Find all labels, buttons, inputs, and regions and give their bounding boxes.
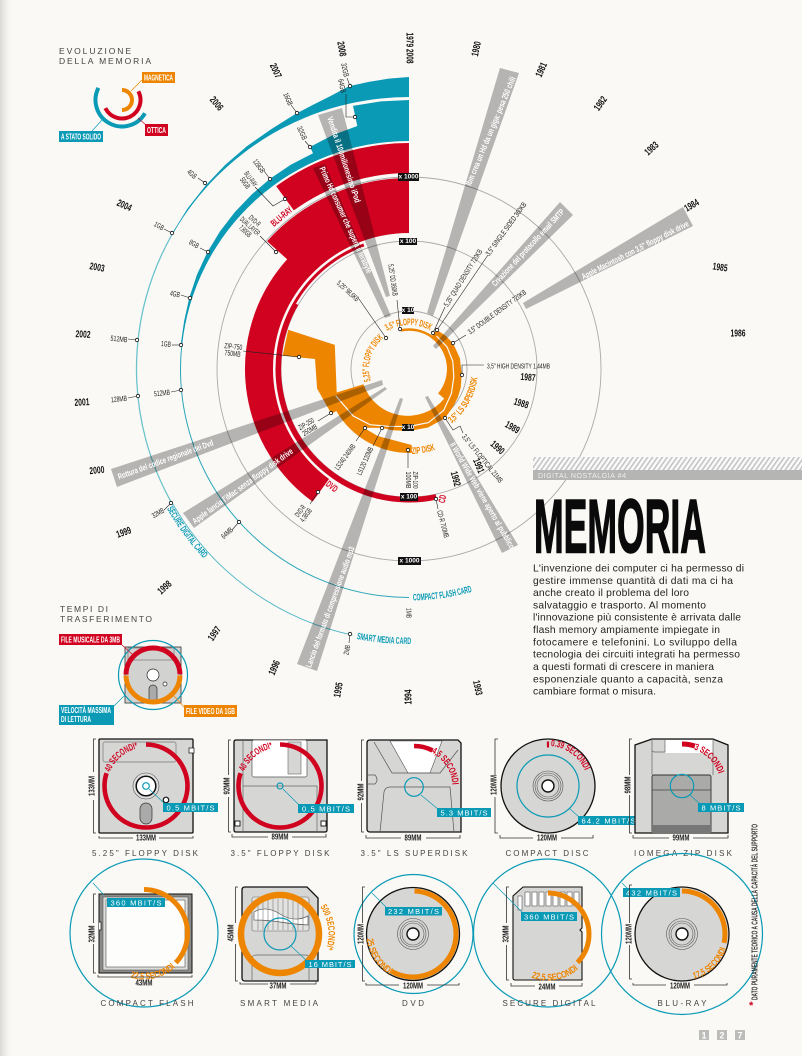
disk: compact flash: 32MM (88, 925, 96, 942)
section heading: evoluzione della memoria: DELLA MEMORIA (59, 56, 151, 66)
section heading: tempi di trasferimento: TRASFERIMENTO (60, 614, 152, 624)
year labels: 1982 (592, 94, 610, 113)
disk: secure digital (473, 858, 622, 1008)
scale rings (217, 177, 601, 561)
disk: secure digital: SECURE DIGITAL (502, 999, 596, 1008)
intro text: salvataggio e trasporto. Al momento (533, 600, 706, 611)
strip captions: Creazione del protocollo email SMTP (490, 207, 567, 288)
disk: 5.25 floppy: 133MM (136, 834, 156, 842)
section band: digital nostalgia: DIGITAL NOSTALGIA #4 (538, 473, 626, 480)
disk: 3.5 LS superdisk: 5.3 MBIT/S (440, 808, 488, 818)
year labels: 1986 (730, 328, 746, 340)
capacity labels: 3,5" HIGH DENSITY 1,44MB (487, 362, 550, 370)
capacity labels: 512MB (110, 334, 128, 344)
strip captions: Il World Wide Web viene aperto al pubblico (448, 441, 517, 550)
disk: dvd: DVD (402, 999, 424, 1008)
capacity labels: LS120 120MB (355, 445, 375, 477)
disk: secure digital: 360 MBIT/S (524, 912, 574, 922)
year labels: 2006 (207, 95, 225, 114)
strip captions: Primo Hd consumer che supera il terabyte (317, 165, 375, 275)
disk: compact flash: COMPACT FLASH (100, 999, 194, 1008)
capacity labels: ZIP-100 (411, 472, 420, 488)
section heading: evoluzione della memoria: EVOLUZIONE (59, 46, 131, 56)
disk: smart media: 16 MBIT/S (308, 960, 352, 969)
page number: 7 (737, 1030, 743, 1040)
disk: 3.5 LS superdisk (356, 739, 491, 858)
year labels: 1996 (267, 659, 283, 677)
legend: transfer times floppy: FILE VIDEO DA 1GB (186, 707, 235, 716)
scale tags: x 100 (400, 238, 417, 245)
year labels: 2008 (334, 41, 348, 58)
year labels: 1989 (503, 419, 521, 437)
capacity labels: 4GB (185, 167, 199, 181)
intro text: anche creato il problema del loro (533, 588, 689, 599)
disk: 5.25 floppy: 5.25" FLOPPY DISK (92, 849, 199, 858)
format name labels: DVD (323, 479, 340, 495)
disk: blu-ray: 432 MBIT/S (626, 888, 677, 898)
scale tags: x 10 (402, 307, 415, 314)
year labels: 1999 (115, 525, 133, 541)
scale tags (398, 173, 421, 565)
strip captions: Vendita il 100milionesimo iPod (325, 115, 363, 204)
page number: 2 (719, 1030, 725, 1040)
legend: memory types: MAGNETICA (144, 74, 173, 82)
intro text: cambiare format o misura. (533, 687, 656, 698)
capacity labels: 5,25" DD 360KB (386, 264, 400, 296)
format name labels: BLU-RAY (269, 204, 295, 229)
disk: smart media: 37MM (270, 982, 287, 990)
strip captions: Apple lancia l'iMac senza floppy disk drive (190, 446, 295, 526)
disk: smart media (226, 886, 355, 1008)
format name labels: SMART MEDIA CARD (357, 632, 411, 644)
disk: iomega zip: IOMEGA ZIP DISK (634, 849, 733, 858)
disk: compact disc: 0.39 SECONDI (551, 740, 591, 770)
intro text: fotocamere e telefonini. Lo sviluppo della (533, 637, 737, 648)
capacity labels: LS240 240MB (333, 442, 357, 472)
intro text: esponenziale quanto a capacità, senza (533, 674, 723, 685)
capacity labels: 8GB (187, 238, 201, 250)
disk: iomega zip: 3 SECONDI (694, 744, 724, 774)
intro text: a questi formati di crescere in maniera (533, 662, 714, 673)
format name labels: SECURE DIGITAL CARD (168, 506, 208, 558)
disk: compact disc (490, 738, 636, 858)
disk: 3.5 LS superdisk: 3.5" LS SUPERDISK (360, 849, 468, 858)
scale tags: x 1000 (399, 174, 419, 180)
capacity labels: 3,5" DOUBLE DENSITY 720KB (466, 288, 528, 336)
disk: blu-ray: 120MM (670, 982, 690, 990)
capacity labels: 100MB (404, 472, 413, 488)
capacity labels: 4GB (169, 289, 181, 299)
disk: 5.25 floppy: 0.5 MBIT/S (166, 804, 214, 812)
disk: 3.5 floppy (222, 739, 354, 858)
scale tags: x 10 (402, 424, 415, 431)
capacity labels: DVD-R (293, 503, 308, 519)
disk: compact disc: 64.2 MBIT/S (582, 816, 636, 826)
format name labels: 5,25" FLOPPY DISK (362, 333, 384, 382)
intro text: L'invenzione dei computer ci ha permesso di (533, 564, 744, 574)
capacity labels: 1GB (152, 220, 166, 232)
year labels: 1991 (470, 457, 486, 475)
disk: secure digital: 24MM (538, 982, 556, 992)
scale tags: x 1000 (400, 558, 420, 564)
scale tags: x 100 (401, 494, 418, 500)
legend: transfer times floppy: DI LETTURA (61, 715, 91, 724)
disk: 5.25 floppy: 133MM (88, 776, 96, 796)
capacity labels: 128MB (111, 394, 127, 404)
format name labels: CD (437, 494, 449, 504)
solid state bands (37, 0, 781, 741)
capacity labels: DUAL LAYER (238, 215, 262, 238)
disk: smart media: 500 SECONDI* (320, 904, 336, 950)
page number: 1 (701, 1030, 707, 1040)
disk: smart media: 45MM (226, 924, 236, 942)
disk: 3.5 floppy: 40 SECONDI* (239, 742, 272, 771)
grey timeline event strips (111, 68, 693, 671)
disk: dvd: 120MM (356, 924, 366, 944)
strip captions (116, 75, 690, 669)
disk: compact flash (69, 858, 219, 1008)
year labels (74, 32, 746, 704)
capacity labels: ZIP-250 (297, 416, 316, 432)
disk: 3.5 floppy: 3.5" FLOPPY DISK (230, 849, 330, 858)
capacity labels: 5,25" QUAD DENSITY 720KB (442, 248, 484, 308)
capacity labels: 128GB (251, 157, 267, 175)
capacity labels: 250MB (301, 422, 319, 438)
year labels: 1997 (206, 624, 224, 643)
leader lines (128, 78, 488, 643)
year labels: 2000 (89, 465, 105, 477)
capacity labels: 50GB (238, 176, 252, 191)
disk: iomega zip: 99MM (672, 834, 690, 842)
disk: secure digital: 22,5 SECONDI (532, 964, 578, 982)
capacity labels: 32GB (339, 62, 351, 78)
capacity labels: DVD-R (247, 213, 263, 229)
disk: 3.5 floppy: 89MM (272, 832, 289, 842)
footnote: DATO PURAMENTE TEORICO A CAUSA DELLA CAPACITÀ DEL SUPPORTO (750, 824, 760, 1000)
capacity labels: 1GB (161, 339, 171, 349)
year labels: 1980 (470, 40, 484, 57)
disk: secure digital: 32MM (502, 925, 510, 942)
disk: dvd (353, 874, 474, 1008)
year labels: 1987 (520, 372, 536, 384)
section band: digital nostalgia (533, 457, 802, 480)
footnote (749, 824, 760, 1012)
disk: smart media: SMART MEDIA (240, 999, 319, 1008)
disk: compact disc: 120MM (537, 834, 557, 842)
disk: dvd: 25 SECONDI (366, 938, 393, 974)
disk: dvd: 120MM (403, 982, 423, 990)
format name labels: 3,5" LS SUPERDISK (448, 376, 478, 423)
capacity labels: 750MB (224, 348, 241, 359)
year labels: 1992 (448, 470, 462, 488)
year labels: 1990 (488, 439, 506, 457)
disk: 3.5 floppy: 92MM (222, 777, 232, 794)
year labels: 1985 (712, 262, 728, 275)
capacity labels: 3,5" LS FLOPTICAL 21MB (460, 432, 505, 485)
optical bands (114, 74, 704, 664)
disk: compact disc: COMPACT DISC (506, 849, 589, 858)
intro text (533, 564, 744, 698)
capacity labels: ZIP-750 (224, 341, 243, 352)
disk: iomega zip: 8 MBIT/S (702, 804, 740, 812)
disk: iomega zip (624, 738, 744, 858)
disk: dvd: 232 MBIT/S (388, 907, 439, 916)
disk: compact flash: 43MM (136, 978, 153, 988)
strip captions: Lancio del formato di compressione audio mp3 (303, 545, 357, 669)
legend: transfer times floppy: FILE MUSICALE DA 3MB (61, 636, 120, 644)
year labels: 1984 (683, 197, 701, 215)
year labels: 1979 2008 (404, 32, 414, 64)
disk: compact disc: 120MM (490, 775, 498, 795)
disk: blu-ray: 17,5 SECONDI (692, 946, 726, 979)
disk: compact flash: 22,5 SECONDI (130, 962, 175, 981)
page number (699, 1030, 745, 1040)
disk: 5.25 floppy: 40 SECONDI* (104, 742, 137, 772)
capacity labels: 32MB (150, 506, 166, 520)
intro text: gestire immense quantità di dati ma ci ha (533, 576, 733, 587)
disk: 5.25 floppy (88, 738, 218, 858)
intro text: tecnologia dei circuiti integrati ha permesso (533, 650, 740, 661)
legend: memory types: OTTICA (147, 126, 166, 135)
section heading: tempi di trasferimento (60, 604, 152, 624)
intro text: l'innovazione più consistente è arrivata dalle (533, 613, 741, 624)
disk: blu-ray: BLU-RAY (658, 999, 707, 1008)
format name labels: COMPACT FLASH CARD (413, 586, 472, 600)
strip captions: Rottura del codice regionale dei Dvd (116, 438, 215, 481)
capacity labels: 4,38GB (298, 506, 314, 524)
capacity labels: 64GB (336, 78, 348, 94)
capacity labels: CD-R 700MB (435, 509, 451, 539)
strip captions: Ibm crea un Hd da un giga: pesa 250 chili (463, 75, 518, 187)
capacity labels: 1MB (404, 608, 414, 618)
disk: 3.5 floppy: 0.5 MBIT/S (302, 804, 350, 814)
year labels: 2002 (75, 329, 91, 341)
capacity labels: 16GB (281, 91, 295, 107)
capacity labels (110, 62, 550, 656)
disk: compact flash: 360 MBIT/S (110, 898, 162, 908)
legend: memory types (59, 64, 175, 142)
legend: transfer times floppy: VELOCITÀ MASSIMA (61, 706, 111, 715)
capacity labels: 2MB (342, 644, 352, 656)
year labels: 1988 (512, 397, 530, 412)
capacity labels: 3,5" SINGLE SIDED 360KB (484, 200, 528, 258)
disk: iomega zip: 98MM (624, 776, 632, 794)
disk: 3.5 LS superdisk: 4,5 SECONDI (432, 748, 459, 784)
year labels: 2004 (115, 198, 133, 214)
section heading: evoluzione della memoria (59, 46, 151, 66)
strip captions: Apple Macintosh con 3,5" floppy disk drive (580, 218, 690, 281)
capacity labels: BLU-RAY (242, 169, 259, 188)
capacity labels: 64MB (219, 525, 235, 541)
legend: memory types: A STATO SOLIDO (61, 132, 101, 142)
legend: transfer times floppy (59, 634, 237, 725)
capacity labels: 512MB (154, 388, 170, 398)
footnote: * (749, 1000, 754, 1012)
year labels: 2003 (89, 261, 106, 275)
capacity labels: 5,25" 98,6KB (335, 279, 361, 303)
magnetic bands (283, 322, 462, 453)
year labels: 1983 (643, 140, 661, 158)
section heading: tempi di trasferimento: TEMPI DI (60, 604, 108, 614)
year labels: 1993 (470, 680, 484, 697)
disk: blu-ray (600, 852, 764, 1016)
year labels: 1994 (404, 689, 414, 704)
disk: 3.5 LS superdisk: 89MM (404, 834, 422, 842)
capacity labels: 32GB (295, 125, 309, 141)
disk: 3.5 LS superdisk: 92MM (356, 783, 366, 800)
capacity labels: 7,80GB (237, 223, 254, 239)
format name labels: ZIP DISK (412, 444, 436, 454)
data points (135, 84, 464, 636)
radial chart: storage capacity spiral (74, 32, 746, 704)
year labels: 2007 (267, 62, 283, 80)
disk: blu-ray: 120MM (624, 924, 634, 944)
format name labels: 3,5" FLOPPY DISK (384, 318, 433, 331)
intro text: flash memory ampiamente impiegate in (533, 625, 720, 636)
year labels: 1995 (332, 681, 346, 698)
year labels: 2001 (74, 397, 90, 409)
format name labels (124, 204, 478, 692)
year labels: 1998 (156, 579, 174, 597)
year labels: 1981 (534, 61, 550, 79)
